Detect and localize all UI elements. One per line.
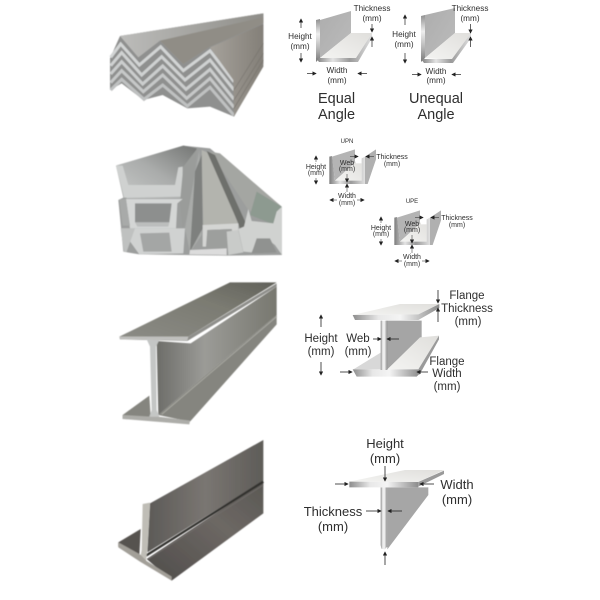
equal angle title [318, 91, 355, 123]
UPE labels: Height [371, 225, 391, 232]
equal angle labels: (mm) [290, 42, 310, 51]
H beam labels: (mm) [455, 316, 482, 328]
unequal angle labels: (mm) [394, 40, 414, 49]
UPE labels [371, 215, 473, 268]
H beam shape [353, 304, 439, 377]
photo: T bar [118, 440, 263, 581]
UPE labels: (mm) [404, 261, 420, 268]
equal angle arrows [301, 19, 372, 74]
photo: stacked steel channels [116, 146, 282, 256]
UPN labels: Web [340, 160, 354, 167]
unequal angle title [409, 91, 463, 123]
unequal angle shape [421, 8, 471, 63]
equal angle labels [288, 4, 390, 85]
UPN labels: (mm) [384, 161, 400, 168]
UPN labels: (mm) [339, 166, 355, 173]
unequal angle arrows [405, 15, 470, 74]
unequal angle title: Unequal [409, 91, 463, 107]
T bar shape [349, 470, 444, 549]
UPE shape [394, 210, 441, 245]
H beam labels: (mm) [345, 346, 372, 358]
UPE labels: (mm) [373, 231, 389, 238]
H beam labels: Web [346, 333, 370, 345]
UPN label: UPN [341, 139, 353, 145]
unequal angle labels: (mm) [426, 76, 446, 85]
T bar labels: (mm) [370, 451, 400, 466]
UPN labels: (mm) [339, 200, 355, 207]
UPN arrows [316, 156, 374, 200]
equal angle shape [316, 11, 372, 62]
unequal angle labels [392, 4, 488, 85]
H beam labels: Flange [429, 356, 465, 368]
diagram: unequal angle [392, 4, 488, 123]
equal angle labels: Thickness [354, 4, 390, 13]
UPE labels: (mm) [404, 227, 420, 234]
diagram: equal angle [288, 4, 390, 123]
unequal angle labels: (mm) [460, 14, 480, 23]
UPE label: UPE [406, 199, 418, 205]
diagram: UPN channel [306, 139, 408, 207]
H beam labels: Width [432, 368, 462, 380]
H beam labels: (mm) [434, 381, 461, 393]
T bar labels: (mm) [442, 492, 472, 507]
equal angle labels: (mm) [327, 76, 347, 85]
unequal angle labels: Height [392, 30, 417, 39]
UPE labels: Web [405, 221, 419, 228]
UPE labels: (mm) [449, 222, 465, 229]
T bar arrows [335, 466, 434, 565]
unequal angle labels: Width [426, 67, 447, 76]
equal angle labels: Height [288, 32, 313, 41]
equal angle title: Angle [318, 107, 355, 123]
diagram: H beam [304, 290, 493, 393]
equal angle labels: Width [327, 66, 348, 75]
UPE arrows [381, 217, 439, 261]
H beam labels: Height [304, 333, 338, 345]
unequal angle labels: Thickness [452, 4, 488, 13]
diagram: T bar [304, 436, 474, 565]
T bar labels [304, 436, 474, 534]
photo: stacked steel angles [110, 13, 263, 117]
UPN labels: (mm) [308, 170, 324, 177]
equal angle labels: (mm) [362, 14, 382, 23]
T bar labels: Width [440, 477, 474, 492]
UPN labels [306, 154, 408, 207]
H beam labels: Flange [449, 290, 485, 302]
H beam arrows [321, 290, 438, 375]
H beam labels: (mm) [308, 346, 335, 358]
H beam labels: Thickness [441, 303, 493, 315]
H beam labels [304, 290, 493, 393]
T bar labels: (mm) [318, 519, 348, 534]
UPE labels: Width [403, 254, 421, 261]
equal angle title: Equal [318, 91, 355, 107]
UPN labels: Width [338, 193, 356, 200]
T bar labels: Height [366, 436, 404, 451]
diagram: UPE channel [371, 199, 473, 268]
T bar labels: Thickness [304, 504, 363, 519]
UPE labels: Thickness [441, 215, 473, 222]
UPN labels: Thickness [376, 154, 408, 161]
UPN shape [329, 149, 376, 184]
UPN labels: Height [306, 164, 326, 171]
unequal angle title: Angle [417, 107, 455, 123]
photo: H beam [119, 282, 277, 424]
